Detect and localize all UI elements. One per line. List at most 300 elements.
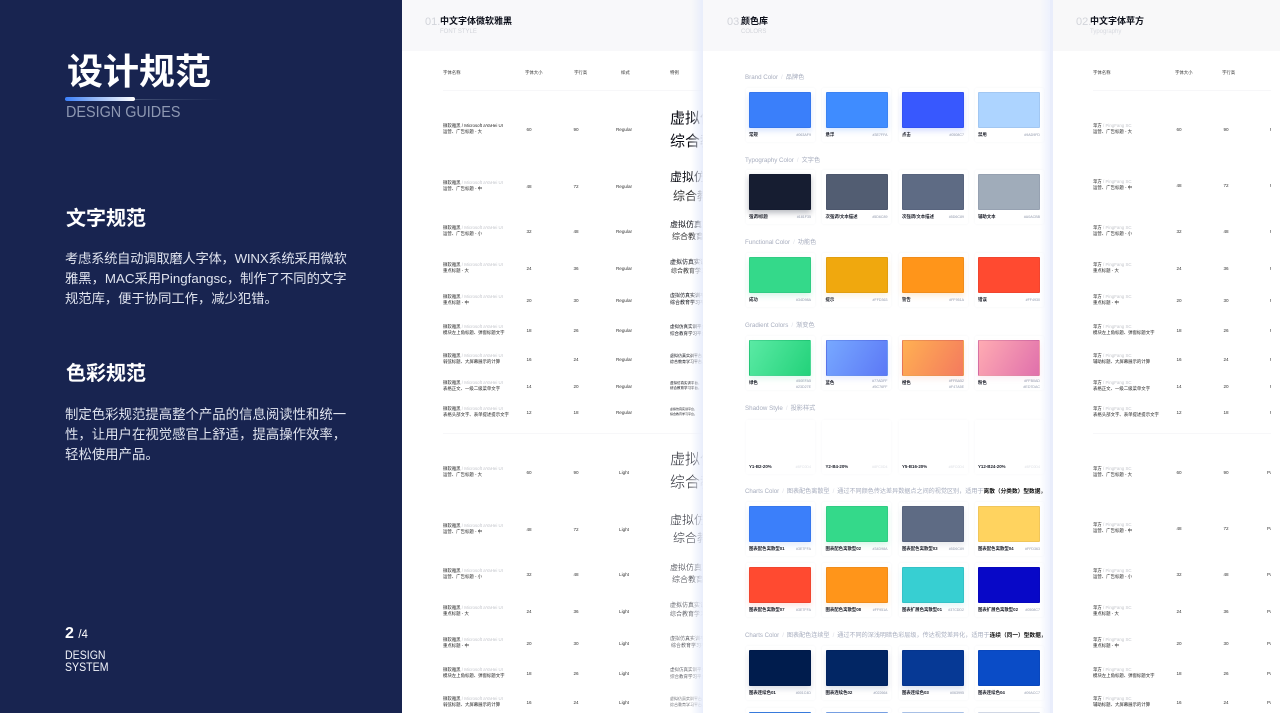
row: light 48: 72 [573, 526, 579, 532]
row: regular 12: 虚拟仿真实训平台， [670, 407, 697, 411]
row: light 60: 60 [526, 470, 532, 474]
row: regular 32 [443, 220, 703, 241]
swatch: continuous 08 [974, 708, 1044, 713]
row: regular 20 [443, 292, 703, 306]
row: regular 16: 16 [1176, 356, 1182, 362]
row: light 32 [1093, 568, 1271, 579]
row: regular 16: Regular [616, 356, 632, 362]
row: light 18: 模块左上角标题、弹窗标题文字 [443, 673, 504, 678]
row: light 18 [1093, 666, 1271, 678]
row: regular 48: 48 [1176, 182, 1182, 188]
row: regular 48: 微软雅黑 / Microsoft aYaHei UI [443, 180, 503, 184]
row: light 24: 36 [573, 608, 579, 614]
row: regular 14: 综合教育学习平台。 [670, 386, 702, 390]
swatch: brand 2: 悬浮 [826, 132, 834, 137]
row: regular 48: Regular [616, 184, 632, 188]
swatch: hint: #FFD363 [873, 298, 888, 302]
row: regular 12: 苹方 / PingFang SC [1093, 406, 1132, 410]
swatch: discrete 07: #3E7FFA [796, 608, 811, 612]
shadow sample: Y5 [898, 420, 968, 474]
row: light 24: 重点标题 - 大 [443, 611, 469, 616]
row: regular 12 [443, 406, 697, 417]
row: regular 18: 模块左上角标题、弹窗标题文字 [443, 330, 504, 335]
row: regular 32: 微软雅黑 / Microsoft aYaHei UI [443, 224, 503, 230]
swatch: error: #FF4930 [1026, 298, 1040, 302]
row: light 32: 苹方 / PingFang SC [1093, 568, 1132, 572]
swatch: extended 02 [974, 563, 1044, 617]
panel: PingFang font table [1050, 0, 1280, 713]
row: light 16 [1093, 692, 1271, 712]
swatch: success [746, 253, 814, 307]
row: light 16: 苹方 / PingFang SC [1093, 696, 1132, 700]
row: light 32 [443, 562, 703, 584]
text: text standards description: 考虑系统自动调取磨人字体，WINX系统采用微软 [65, 251, 347, 266]
row: regular 16: 弱弦标题、大屏幕展示的计算 [443, 359, 500, 364]
row: regular 14: 苹方 / PingFang SC [1093, 380, 1132, 384]
row: regular 16: 微软雅黑 / Microsoft aYaHei UI [443, 352, 503, 358]
row: regular 24: 36 [573, 266, 579, 270]
footer label: SYSTEM [65, 662, 109, 674]
header: font style [402, 0, 703, 51]
swatch: text 3: #5D6C89 [949, 214, 964, 218]
row: light 32: 48 [1223, 572, 1229, 576]
row: regular 14: 微软雅黑 / Microsoft aYaHei UI [443, 380, 503, 384]
table header: 字行高 [574, 70, 587, 75]
row: light 60 [443, 451, 703, 490]
row: light 24: 重点标题 - 大 [1093, 611, 1119, 616]
row: light 20: 苹方 / PingFang SC [1093, 636, 1132, 642]
heading: discrete chart colors: Charts Color / 图表配色离散型 / 通过不同颜色传达差异数据点之间的视觉区别，适用于离散（分类数）型数据， [745, 488, 1046, 495]
heading: color standards: 色彩规范 [66, 363, 146, 385]
swatch: blue gradient: 蓝色 [826, 380, 834, 385]
row: regular 60: Regular [616, 126, 632, 132]
swatch: green gradient: 绿色 [749, 380, 758, 385]
row: light 16: 16 [1176, 700, 1182, 704]
swatch: hint: 提示 [826, 297, 834, 302]
swatch: text 2: #5D6C89 [872, 214, 888, 218]
swatch: continuous 05 [746, 708, 814, 713]
row: light 18: 26 [1223, 671, 1229, 676]
swatch: orange gradient [898, 336, 968, 390]
row: regular 48: 运营、广告标题 - 中 [443, 186, 482, 191]
heading: brand color: Brand Color / 品牌色 [745, 74, 804, 81]
row: regular 18 [443, 324, 703, 336]
swatch: extended 02: 图表扩展色离散型02 [978, 607, 1018, 612]
swatch: discrete 08: #FF951A [873, 608, 888, 612]
text: color standards description: 性，让用户在视觉感官上舒适，提高操作效率， [65, 427, 346, 442]
row: light 18: Light [619, 671, 629, 676]
row: light 60: Light [619, 470, 629, 474]
row: light 32: 32 [1176, 572, 1182, 576]
row: regular 16: 16 [526, 356, 532, 362]
row: light 32: 32 [526, 572, 532, 576]
row: light 18: 微软雅黑 / Microsoft aYaHei UI [443, 667, 503, 672]
row: regular 24: 微软雅黑 / Microsoft aYaHei UI [443, 262, 503, 266]
row: regular 60 [443, 110, 703, 150]
row: regular 20: 30 [1223, 298, 1229, 302]
swatch: continuous 03: #063995 [950, 690, 964, 694]
row: regular 32: 48 [573, 228, 579, 234]
text: text standards description: 规范库，便于协同工作，减少犯错。 [65, 291, 278, 306]
header: font style: 01. [425, 16, 440, 28]
row: light 60: 运营、广告标题 - 大 [443, 472, 482, 477]
row: regular 48 [1093, 178, 1271, 190]
row: regular 24: 苹方 / PingFang SC [1093, 262, 1132, 266]
row: regular 48: 72 [573, 184, 579, 188]
row: regular 24: 24 [526, 266, 532, 270]
shadow sample: Y12 [974, 420, 1044, 474]
row: light 60: 60 [1176, 470, 1182, 474]
row: regular 48: 72 [1223, 182, 1229, 188]
swatch: orange gradient: #FFBA52 [949, 378, 964, 382]
heading: typography color: Typography Color / 文字色 [745, 157, 820, 164]
row: regular 20: 20 [526, 298, 532, 302]
swatch: text 1: #181F35 [797, 214, 811, 218]
row: light 60 [1093, 466, 1271, 477]
row: light 24 [1093, 604, 1271, 616]
row: regular 48: 48 [526, 184, 532, 188]
swatch: extended 01 [898, 563, 968, 617]
swatch: pink gradient [974, 336, 1044, 390]
swatch: orange gradient: 橙色 [902, 380, 911, 385]
row: regular 16 [443, 352, 703, 364]
row: regular 12: 综合教育学习平台。 [670, 412, 697, 416]
heading: continuous chart colors: Charts Color / 图表配色连续型 / 通过不同的深浅明暗色彩层级，传达视觉差异化，适用于连续（同一）型数据， [745, 632, 1046, 639]
swatch: discrete 08 [822, 563, 891, 617]
swatch: continuous 03 [898, 646, 968, 700]
row: light 24: 24 [526, 608, 532, 614]
shadow sample: Y2: Y2-B4-20% [826, 464, 848, 469]
swatch: text 2: 次强调/文本描述 [826, 214, 857, 219]
swatch: text 4: 辅助文本 [978, 214, 996, 219]
swatch: green gradient: #50EFA5 [796, 378, 811, 382]
panel: Microsoft YaHei font table [402, 0, 703, 713]
row: light 20: 20 [1176, 640, 1182, 646]
row: regular 18: 18 [1176, 328, 1182, 333]
swatch: continuous 07 [898, 708, 968, 713]
shadow sample: Y12: #8FC0D4 [1025, 464, 1040, 468]
swatch: discrete 04: 图表配色离散型04 [978, 546, 1014, 551]
row: light 32: 微软雅黑 / Microsoft aYaHei UI [443, 568, 503, 572]
row: light 20: 20 [526, 640, 532, 646]
row: light 20: 重点标题 - 中 [443, 643, 469, 648]
swatch: brand 2: #3E7FFA [873, 132, 888, 136]
row: light 18: 模块左上角标题、弹窗标题文字 [1093, 673, 1154, 678]
row: regular 48: 运营、广告标题 - 中 [1093, 185, 1132, 190]
row: light 32: 运营、广告标题 - 小 [443, 574, 482, 579]
swatch: discrete 03: #5D6C89 [949, 546, 964, 550]
row: regular 18: Regular [616, 328, 632, 333]
row: regular 18 [1093, 324, 1271, 335]
row: light 48: 48 [526, 526, 532, 532]
row: regular 12: Regular [616, 410, 632, 414]
row: regular 14: 表格正文、一级二级菜单文字 [443, 386, 500, 391]
swatch: warning: 警告 [902, 297, 911, 302]
swatch: extended 02: #0508C7 [1025, 608, 1040, 612]
heading: functional color: Functional Color / 功能色 [745, 239, 816, 246]
swatch: text 3: 次强调/文本描述 [902, 214, 934, 219]
row: regular 14 [443, 380, 702, 391]
swatch: brand 4 [974, 88, 1044, 142]
swatch: brand 2 [822, 88, 891, 142]
panel: left navy sidebar [0, 0, 402, 713]
shadow sample: Y5: #8FC0D4 [949, 464, 964, 468]
swatch: discrete 01 [746, 502, 814, 556]
row: light 16: 弱弦标题、大屏幕展示的计算 [443, 702, 500, 707]
row: light 16: Light [619, 700, 629, 704]
row: light 24: Light [619, 608, 629, 614]
header: font style: 中文字体微软雅黑 [440, 16, 512, 26]
swatch: brand 3: #0508C7 [949, 132, 964, 136]
swatch: continuous 01: 图表连续色01 [749, 690, 776, 695]
row: regular 18: 26 [573, 328, 579, 333]
row: regular 20: Regular [616, 298, 632, 302]
row: regular 12 [1093, 406, 1271, 417]
shadow sample: Y1 [746, 420, 814, 474]
row: regular 32: 32 [1176, 228, 1182, 234]
row: light 16: 16 [526, 700, 532, 704]
header: typography: Typography [1090, 29, 1121, 35]
text: text standards description [65, 249, 347, 309]
row: light 48: 48 [1176, 526, 1182, 530]
header: typography: 02. [1076, 16, 1091, 28]
row: light 48: 72 [1223, 526, 1229, 530]
heading: shadow style: Shadow Style / 投影样式 [745, 405, 815, 412]
row: regular 12: 表格头部文字、表单提述提示文字 [1093, 412, 1159, 417]
row: light 24: 24 [1176, 608, 1182, 614]
row: light 48 [443, 512, 703, 545]
swatch: pink gradient: #ED7DAC [1023, 384, 1040, 388]
row: light 24: 微软雅黑 / Microsoft aYaHei UI [443, 604, 503, 610]
row: regular 12: 18 [573, 410, 579, 414]
swatch: discrete 03: 图表配色离散型03 [902, 546, 938, 551]
row: light 48: 运营、广告标题 - 中 [443, 529, 482, 534]
row: regular 16: 24 [573, 356, 579, 362]
row: regular 60: 运营、广告标题 - 大 [443, 129, 482, 134]
swatch: brand 3: 点击 [902, 132, 911, 137]
swatch: warning [898, 253, 968, 307]
swatch: continuous 01 [746, 646, 814, 700]
row: light 20: Light [619, 640, 629, 646]
row: light 48: 微软雅黑 / Microsoft aYaHei UI [443, 522, 503, 528]
swatch: text 1: 强调/标题 [749, 214, 768, 219]
row: regular 18: 微软雅黑 / Microsoft aYaHei UI [443, 324, 503, 329]
row: regular 32: 32 [526, 228, 532, 234]
swatch: continuous 03: 图表连续色03 [902, 690, 929, 695]
row: light 20: 30 [1223, 640, 1229, 646]
row: regular 14: 14 [526, 384, 532, 388]
row: regular 32: Regular [616, 228, 632, 234]
row: regular 32: 48 [1223, 228, 1229, 234]
row: regular 16 [1093, 352, 1271, 364]
subtitle: DESIGN GUIDES [66, 104, 180, 121]
swatch: discrete 01: #3E7FFA [796, 546, 811, 550]
title underline [65, 97, 222, 102]
shadow sample: Y2: #8FC0D4 [872, 464, 888, 468]
header: font style: FONT STYLE [440, 29, 477, 35]
row: regular 24: 重点标题 - 大 [1093, 268, 1119, 273]
header: typography: 中文字体苹方 [1090, 16, 1144, 26]
row: regular 16: 辅助标题、大屏幕展示的计算 [1093, 359, 1150, 364]
row: regular 20: 重点标题 - 中 [1093, 300, 1119, 305]
row: light 60: 苹方 / PingFang SC [1093, 466, 1132, 470]
swatch: pink gradient: 粉色 [978, 380, 987, 385]
row: regular 14: 20 [573, 384, 579, 388]
table header: 字体名称 [1093, 70, 1111, 75]
header: colors: COLORS [741, 29, 766, 35]
row: light 48 [1093, 522, 1271, 533]
table header: 特例 [670, 70, 679, 75]
swatch: blue gradient: #5C76FF [873, 384, 888, 388]
row: regular 60: 90 [573, 126, 579, 132]
swatch: brand 1 [746, 88, 814, 142]
row: regular 20: 微软雅黑 / Microsoft aYaHei UI [443, 294, 503, 298]
row: regular 16: 苹方 / PingFang SC [1093, 352, 1132, 358]
row: regular 14: 20 [1223, 384, 1229, 388]
row: regular 20: 30 [573, 298, 579, 302]
row: light 32: 运营、广告标题 - 小 [1093, 574, 1132, 579]
swatch: discrete 02 [822, 502, 891, 556]
swatch: continuous 04: #09ACC7 [1024, 690, 1040, 694]
swatch: success: #34D98A [796, 298, 811, 302]
page number: 2 /4 [65, 625, 88, 642]
row: light 20 [1093, 636, 1271, 648]
shadow sample: Y1: #8FC0D4 [796, 464, 811, 468]
swatch: orange gradient: #F47A5E [949, 384, 964, 388]
row: regular 20 [1093, 294, 1271, 305]
row: regular 32: 苹方 / PingFang SC [1093, 224, 1132, 230]
header: colors [703, 0, 1050, 51]
row: light 60: 90 [573, 470, 579, 474]
row: light 16 [443, 696, 703, 707]
swatch: success: 成功 [749, 297, 758, 302]
swatch: pink gradient: #FFB0AD [1024, 378, 1040, 382]
table header: 字体名称 [443, 70, 461, 75]
heading: gradient colors: Gradient Colors / 渐变色 [745, 322, 815, 329]
row: light 18: 26 [573, 671, 579, 676]
swatch: brand 3 [898, 88, 968, 142]
table header: 字体大小 [525, 70, 543, 75]
table header [1093, 70, 1235, 75]
row: regular 14: 表格正文、一级二级菜单文字 [1093, 386, 1150, 391]
row: light 32: 48 [573, 572, 579, 576]
heading: text standards: 文字规范 [66, 208, 146, 230]
swatch: text 3 [898, 170, 968, 224]
row: regular 60: 90 [1223, 126, 1229, 132]
footer label [65, 650, 109, 674]
swatch: error [974, 253, 1044, 307]
swatch: extended 01: 图表扩展色离散型01 [902, 607, 942, 612]
swatch: brand 4: 禁用 [978, 132, 987, 137]
row: regular 18: 模块左上角标题、弹窗标题文字 [1093, 330, 1154, 335]
swatch: discrete 02: #34D98A [872, 546, 888, 550]
row: regular 14: Regular [616, 384, 632, 388]
row: regular 12: 表格头部文字、表单提述提示文字 [443, 412, 509, 417]
row: light 18 [443, 667, 703, 678]
row: light 18: 18 [526, 671, 532, 676]
shadow sample: Y1: Y1-B2-20% [749, 464, 772, 469]
shadow sample: Y2 [822, 420, 891, 474]
row: regular 24: 24 [1176, 266, 1182, 270]
swatch: discrete 07 [746, 563, 814, 617]
row: regular 32: 运营、广告标题 - 小 [1093, 231, 1132, 236]
row: regular 48: 苹方 / PingFang SC [1093, 178, 1132, 184]
swatch: discrete 04: #FFD363 [1025, 546, 1040, 550]
table header [443, 70, 679, 75]
text: color standards description: 制定色彩规范提高整个产品的信息阅读性和统一 [65, 407, 346, 422]
row: regular 16: 24 [1223, 356, 1229, 362]
row: light 60: 运营、广告标题 - 大 [1093, 472, 1132, 477]
swatch: continuous 06 [822, 708, 891, 713]
row: regular 24 [1093, 262, 1271, 273]
swatch: continuous 02: #022664 [874, 690, 888, 694]
row: light 18: 苹方 / PingFang SC [1093, 667, 1132, 672]
shadow sample: Y5: Y5-B16-20% [902, 464, 927, 469]
swatch: brand 1: #063AF9 [796, 132, 811, 136]
table header: 字体大小 [1175, 70, 1193, 75]
swatch: hint [822, 253, 891, 307]
row: regular 60 [1093, 122, 1271, 134]
swatch: discrete 08: 图表配色离散型08 [826, 607, 861, 612]
row: light 60: 微软雅黑 / Microsoft aYaHei UI [443, 466, 503, 470]
swatch: text 2 [822, 170, 891, 224]
row: light 16: 24 [1223, 700, 1229, 704]
swatch: warning: #FF951A [949, 298, 964, 302]
swatch: continuous 02 [822, 646, 891, 700]
row: regular 12: 微软雅黑 / Microsoft aYaHei UI [443, 406, 503, 410]
swatch: green gradient [746, 336, 814, 390]
row: light 32: Light [619, 572, 629, 576]
text: color standards description: 轻松使用产品。 [65, 447, 159, 462]
swatch: brand 1: 常规 [749, 132, 758, 137]
row: regular 20: 20 [1176, 298, 1182, 302]
swatch: discrete 07: 图表配色离散型07 [749, 607, 785, 612]
row: light 16: 辅助标题、大屏幕展示的计算 [1093, 702, 1150, 707]
header: colors: 03. [727, 16, 742, 28]
row: light 20: 30 [573, 640, 579, 646]
row: regular 60: 苹方 / PingFang SC [1093, 122, 1132, 128]
row: light 48: 苹方 / PingFang SC [1093, 522, 1132, 526]
text: color standards description [65, 405, 346, 465]
row: regular 32: 运营、广告标题 - 小 [443, 231, 482, 236]
row: light 16: 微软雅黑 / Microsoft aYaHei UI [443, 696, 503, 700]
panel: colors (centre sheet) [703, 0, 1050, 713]
row: regular 18: 苹方 / PingFang SC [1093, 324, 1132, 329]
swatch: continuous 02: 图表连续色02 [826, 690, 852, 695]
row: light 20: 重点标题 - 中 [1093, 643, 1119, 648]
swatch: discrete 02: 图表配色离散型02 [826, 546, 861, 551]
swatch: brand 4: #9AD9FD [1024, 132, 1040, 136]
row: regular 12: 12 [526, 410, 532, 414]
title: 设计规范 [67, 51, 211, 92]
row: regular 18: 26 [1223, 328, 1229, 333]
text: text standards description: 雅黑，MAC采用Pingfangsc，制作了不同的文字 [65, 271, 346, 286]
row: regular 14: 虚拟仿真实训平台， [670, 380, 702, 384]
row: regular 24: 36 [1223, 266, 1229, 270]
swatch: error: 错误 [978, 297, 987, 302]
swatch: blue gradient: #77ADFF [872, 378, 888, 382]
row: regular 12: 18 [1223, 410, 1229, 414]
swatch: continuous 01: #001C4D [796, 690, 811, 694]
row: light 48: Light [619, 526, 629, 532]
row: regular 48 [443, 170, 703, 202]
swatch: discrete 03 [898, 502, 968, 556]
row: regular 24 [443, 258, 703, 275]
row: regular 14 [1093, 380, 1271, 391]
row: regular 60: 60 [1176, 126, 1182, 132]
row: light 24: 36 [1223, 608, 1229, 614]
swatch: continuous 04 [974, 646, 1044, 700]
